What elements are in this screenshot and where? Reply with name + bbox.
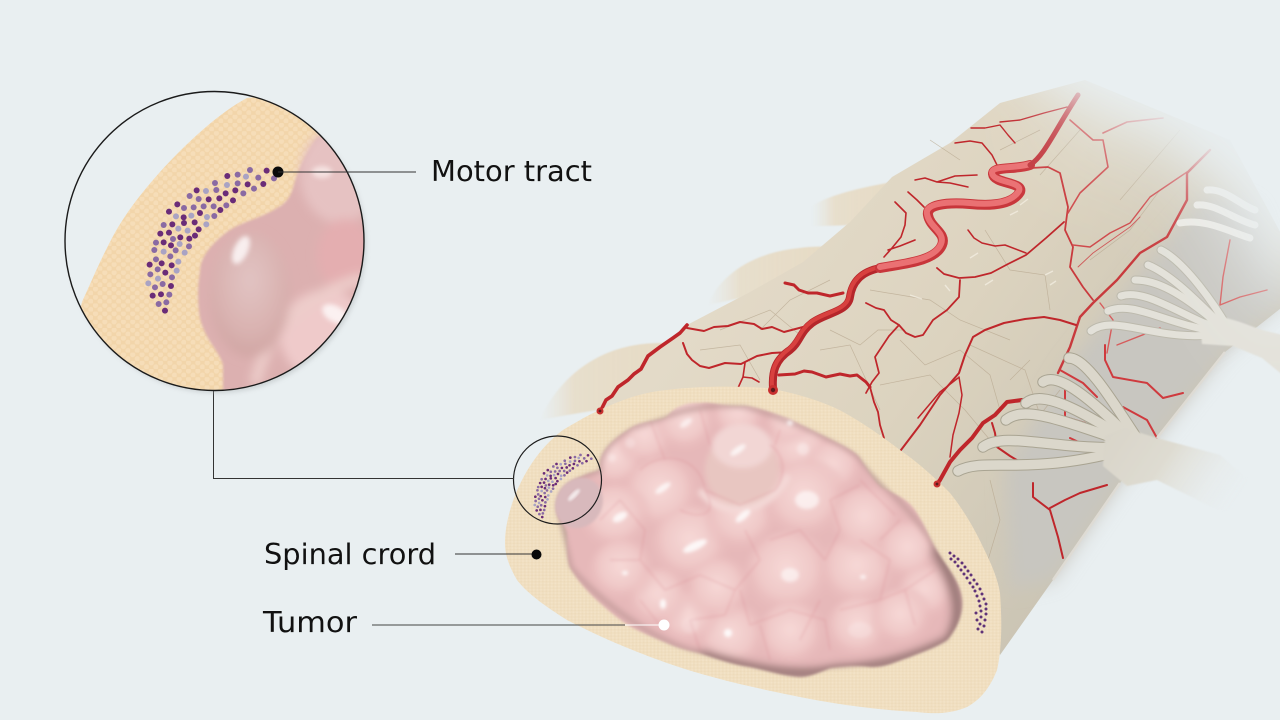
small mauve lump in circle [546,469,612,537]
spinal cord body with arteries and nerve roots [540,80,1280,655]
inset tumor lobes [228,134,361,385]
tumor leader white part [625,624,664,626]
cord surface [597,80,1280,655]
large dimple lobe [706,453,778,505]
tumor soft shadow [557,405,957,671]
tract dots: left side of cross-section [533,454,593,518]
inset outline [65,92,364,390]
tumor highlights [608,417,872,638]
capillaries [700,130,1180,570]
inset content [81,98,364,390]
inset background [66,92,364,390]
motor tract text: Motor tract [431,155,592,188]
label: spinal cord [264,538,542,571]
artery mouths on cut surface [596,385,940,488]
illustration: spinal cord [505,80,1280,713]
motor tract leader [278,171,416,173]
edge rim of cord [1053,352,1225,580]
inset motor tract dots [145,167,277,314]
grey shaded side of cord [1012,227,1280,590]
label: tumor [262,606,670,639]
tumor dark lower-right edge [700,548,958,675]
label: motor tract [272,155,592,188]
tumor text: Tumor [262,606,357,639]
tumor edge shading [557,405,957,671]
motor tract marker [272,166,284,178]
inset shadow [68,95,366,393]
inset magnified circle [60,90,380,400]
inset tumor [197,139,363,390]
spinal cord leader [455,553,536,555]
inset cord tissue [81,98,320,390]
lower nerve root [1102,432,1217,495]
main artery [772,95,1078,388]
tumor mass [564,402,964,679]
callout connector from inset to detail circle [214,390,514,478]
lower nerve fan [958,358,1138,471]
left nerve roots [549,182,886,417]
tumor [554,402,964,679]
small detail circle on cross-section [514,436,602,524]
surface glints [880,199,1056,441]
upper nerve root [1201,317,1280,373]
tumor lobes [591,403,946,658]
spinal cord text: Spinal crord [264,538,436,571]
cut cross-section of the cord [505,387,1001,713]
tumor veins [602,434,922,636]
branch arteries [600,107,1267,558]
spinal cord marker [532,550,542,560]
inset tumor highlights [228,166,351,328]
tumor leader dark part [372,624,625,626]
tumor marker [658,620,670,630]
upper nerve fan [1091,190,1255,336]
tract dots: right side of cross-section [948,552,988,634]
